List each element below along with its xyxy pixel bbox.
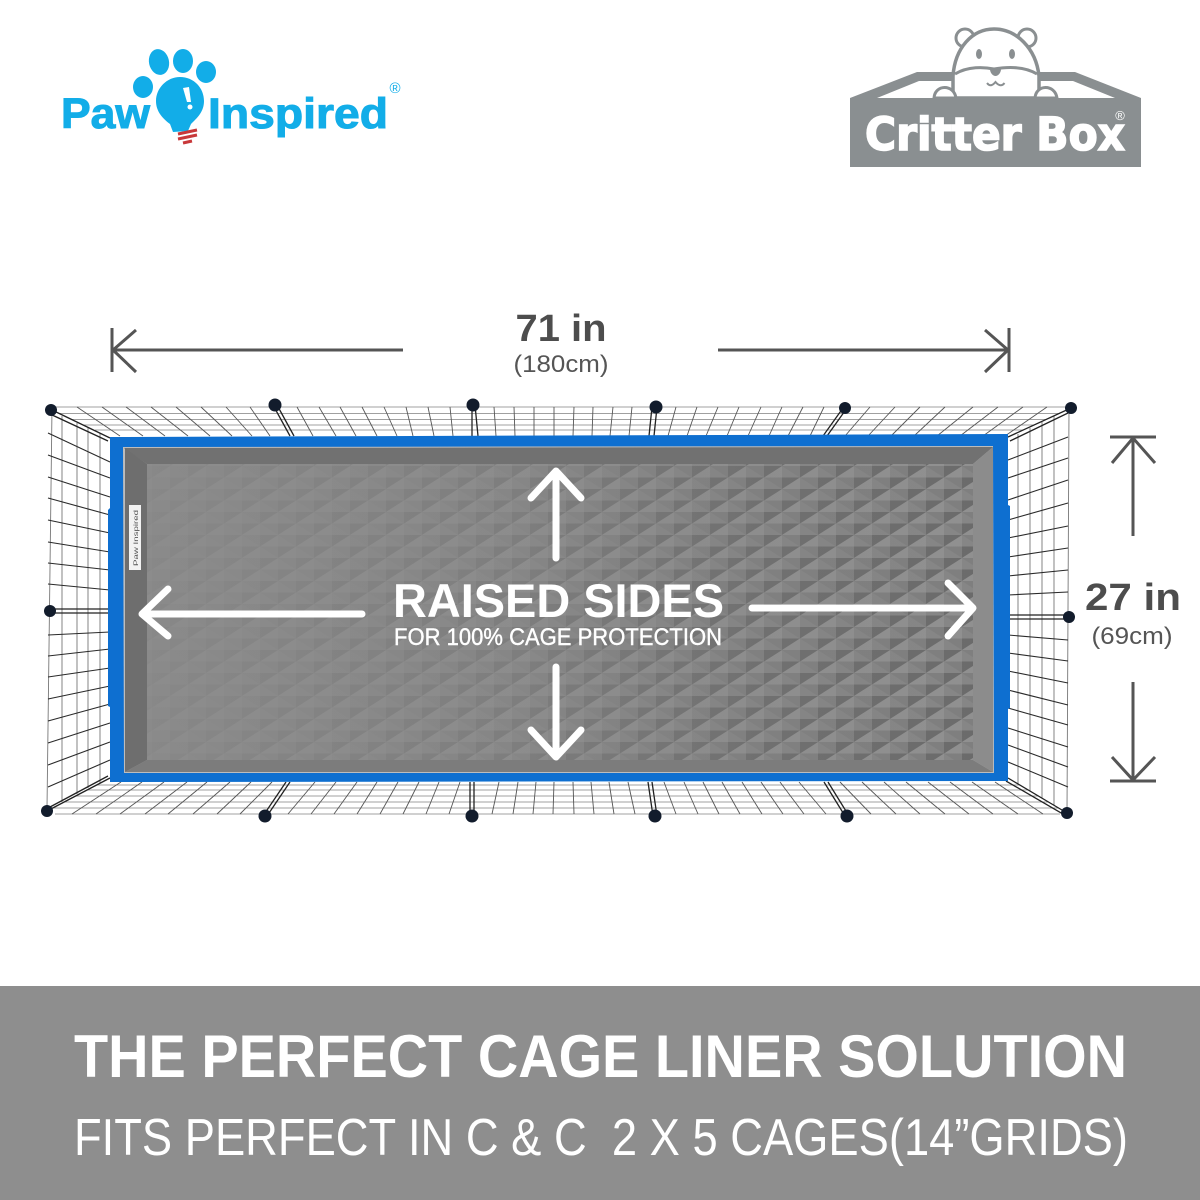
footer band (0, 986, 1200, 1200)
wordmark Inspired: Inspired (208, 90, 388, 138)
liner floor left fade (147, 462, 973, 761)
wordmark Critter Box: Critter Box (865, 108, 1125, 161)
arrow up (531, 471, 581, 558)
cage connector nodes (41, 398, 1077, 822)
arrow down (531, 667, 581, 757)
wordmark Paw: Paw (61, 90, 151, 138)
registered mark: ® (1115, 108, 1125, 123)
sewn-in label: Paw Inspired (133, 509, 140, 566)
left grid panel (47, 408, 110, 808)
footer headline: THE PERFECT CAGE LINER SOLUTION (74, 1023, 1127, 1090)
depth arrow up (1110, 437, 1156, 536)
registered mark: ® (389, 80, 401, 97)
bottom wall (125, 760, 993, 772)
heavy connector wires (47, 405, 1071, 816)
dimension: depth 27 in (1085, 437, 1181, 781)
icon: paw toes (133, 47, 216, 98)
liner outer edge (123, 446, 994, 773)
wire cage grid (47, 405, 1071, 816)
arrow left (142, 589, 362, 636)
blue corrugated base (108, 434, 1010, 782)
depth arrow down (1110, 682, 1156, 781)
top wall (124, 447, 993, 464)
right wall (973, 447, 993, 772)
width value: 71 in (516, 308, 606, 350)
width arrow right (718, 328, 1009, 372)
arrow right (752, 583, 973, 636)
raised sides callout (142, 471, 973, 757)
dimension: width 71 in (112, 308, 1009, 378)
top grid panel (52, 407, 1071, 436)
callout subheading: FOR 100% CAGE PROTECTION (394, 624, 722, 651)
bottom grid panel (53, 782, 1060, 814)
right grid panel (1008, 408, 1069, 812)
depth value: 27 in (1085, 577, 1181, 619)
band background (0, 986, 1200, 1200)
depth metric: (69cm) (1092, 623, 1172, 650)
sewn-in label (129, 505, 141, 570)
width arrow left (112, 328, 403, 372)
callout heading: RAISED SIDES (393, 574, 724, 627)
box front (850, 98, 1141, 167)
cage liner product (108, 434, 1010, 782)
width metric: (180cm) (514, 351, 608, 378)
left wall (125, 448, 147, 772)
icon: hamster (934, 29, 1057, 98)
box roof (850, 72, 1141, 98)
icon: light bulb (156, 77, 204, 143)
logo: Paw Inspired (61, 47, 401, 143)
liner floor (147, 462, 973, 761)
logo: Critter Box (850, 29, 1141, 167)
